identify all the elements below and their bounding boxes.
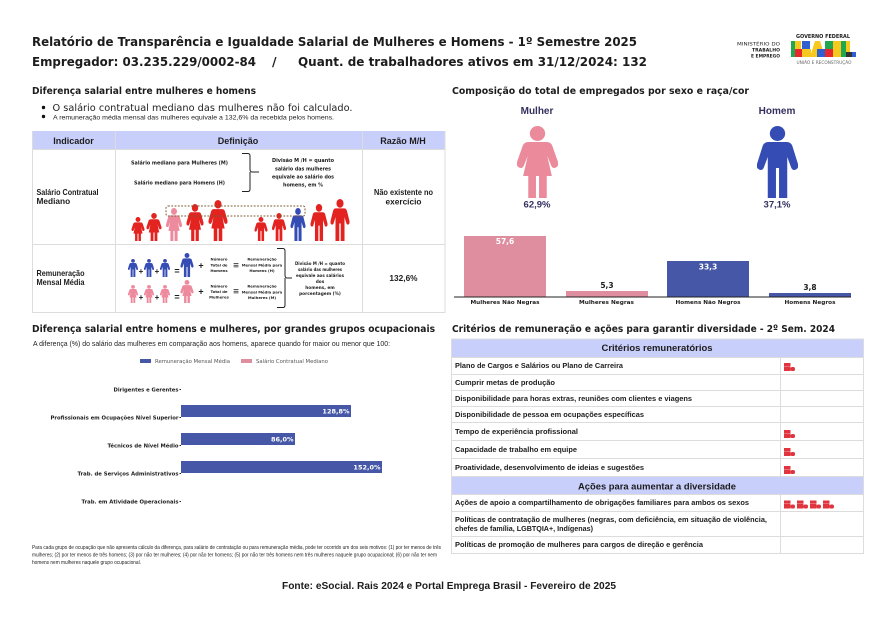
title: Relatório de Transparência e Igualdade Salarial de Mulheres e Homens - 1º Semestre 2025 [32, 34, 637, 49]
bullet list: O salário contratual mediano das mulheres não foi calculado. [52, 103, 352, 114]
definition: salário mediano: homens, em % [283, 182, 324, 188]
definition: remuneração formula [128, 248, 345, 308]
pictogram: median line of people [131, 199, 350, 241]
definition: remuneração formula: homens, em [305, 285, 335, 291]
bar chart: composição por sexo e raça: Mulheres Negras [579, 300, 635, 306]
section header: ações para aumentar a diversidade: Ações para aumentar a diversidade [578, 482, 736, 492]
footnote: mulheres; (2) por ter menos de três homens; (3) por não ter mulheres; (4) por não ter homens; (5) por não ter três homens nem três mulheres naquele grupo ocupacional; (6) por não ter nem [32, 552, 437, 558]
icon: homem 37,1%: 37,1% [764, 200, 791, 210]
logo: ministério e governo federal: MINISTÉRIO DO [737, 40, 781, 48]
legend [140, 358, 328, 365]
table: indicadores: Definição [218, 136, 259, 146]
definition: remuneração formula: ≡ [233, 286, 239, 298]
definition: remuneração formula: Mensal Média para [242, 262, 283, 268]
icon: mulher 62,9% [517, 106, 558, 210]
definition: remuneração formula: + [139, 267, 144, 276]
criteria list: Disponibilidade de pessoa em ocupações específicas [455, 410, 644, 419]
actions list: Políticas de promoção de mulheres para cargos de direção e gerência [455, 540, 704, 549]
logo: ministério e governo federal: GOVERNO FEDERAL [796, 34, 850, 40]
legend: Salário Contratual Mediano [256, 358, 328, 365]
definition: remuneração formula: Mensal Média para [242, 290, 283, 294]
definition: remuneração formula: Remuneração [247, 256, 277, 262]
bullet list [42, 103, 353, 122]
bar chart: grupos ocupacionais: 128,8% [322, 408, 350, 416]
criteria list: Plano de Cargos e Salários ou Plano de Carreira [455, 361, 624, 370]
bar chart: composição por sexo e raça: Homens Negros [784, 300, 836, 306]
definition: salário mediano: equivale ao salário dos [272, 174, 334, 180]
criteria list: Tempo de experiência profissional [455, 427, 578, 436]
definition: remuneração formula: + [155, 267, 160, 276]
footnote: homens nem mulheres naquele grupo ocupacional. [32, 560, 141, 566]
footnote [32, 545, 441, 566]
icon: mulher 62,9%: 62,9% [524, 200, 551, 210]
section header: critérios remuneratórios: Critérios remuneratórios [602, 343, 712, 353]
definition: remuneração formula: Mulheres [209, 294, 230, 300]
icons: building markers [784, 363, 834, 508]
table: indicadores: Razão M/H [380, 136, 426, 146]
definition: remuneração formula: Homens [210, 268, 228, 273]
row label: salário contratual mediano: Salário Contratual [36, 187, 98, 197]
source line: Fonte: eSocial. Rais 2024 e Portal Emprega Brasil - Fevereiro de 2025 [282, 581, 616, 592]
definition: remuneração formula: = [174, 292, 180, 302]
table: indicadores: exercício [386, 196, 421, 206]
definition: remuneração formula: + [139, 293, 144, 302]
definition: remuneração formula: + [198, 286, 204, 296]
logo: ministério e governo federal: TRABALHO [752, 48, 780, 54]
definition: salário mediano: Salário mediano para Mulheres (M) [131, 160, 228, 166]
heading: diferença salarial: Diferença salarial entre mulheres e homens [32, 86, 256, 97]
actions list: Ações de apoio a compartilhamento de obrigações familiares para ambos os sexos [455, 498, 749, 507]
subheading: explicação: A diferença (%) do salário das mulheres em comparação aos homens, aparece quando for maior ou menor que 100: [33, 339, 390, 348]
definition: remuneração formula: dos [316, 279, 325, 285]
definition: remuneração formula: Mulheres (M) [248, 295, 276, 300]
bar chart: grupos ocupacionais: Trab. de Serviços Administrativos [78, 472, 179, 478]
definition: remuneração formula: salário das mulheres [298, 266, 342, 273]
table: indicadores: Indicador [53, 136, 94, 146]
definition: remuneração formula: Divisão M /H = quanto [295, 261, 345, 267]
bar chart: composição por sexo e raça [454, 236, 851, 306]
table: critérios e ações [452, 339, 864, 554]
bar chart: grupos ocupacionais: 152,0% [353, 464, 381, 472]
actions list: chefes de família, LGBTQIA+, Indígenas) [455, 524, 593, 533]
bar chart: composição por sexo e raça: 33,3 [699, 262, 717, 272]
table: indicadores: Mensal Média [36, 277, 85, 287]
bar chart: grupos ocupacionais [50, 388, 382, 506]
criteria list: Disponibilidade para horas extras, reuniões com clientes e viagens [455, 394, 692, 403]
criteria list: Capacidade de trabalho em equipe [455, 445, 577, 454]
legend: Remuneração Mensal Média [155, 358, 230, 365]
table: indicadores: Mediano [36, 196, 70, 206]
bar chart: grupos ocupacionais: Trab. em Atividade Operacionais [82, 500, 179, 506]
bar chart: grupos ocupacionais: 86,0% [271, 436, 294, 444]
icon: mulher 62,9%: Mulher [521, 106, 553, 117]
title: Empregador: 03.235.229/0002-84 [32, 54, 256, 69]
heading: critérios de remuneração: Critérios de remuneração e ações para garantir diversidade - 2º Sem. 2024 [452, 323, 835, 335]
actions list [455, 498, 767, 549]
bar chart: composição por sexo e raça: 57,6 [496, 237, 514, 246]
bar chart: composição por sexo e raça: Mulheres Não Negras [470, 300, 540, 306]
definition: salário mediano: Salário mediano para Homens (H) [134, 180, 225, 186]
row label: remuneração mensal média: Remuneração [36, 268, 84, 278]
actions list: Políticas de contratação de mulheres (negras, com deficiência, em situação de violência, [455, 515, 767, 524]
logo: ministério e governo federal: E EMPREGO [751, 54, 780, 60]
definition: remuneração formula: + [198, 260, 204, 270]
definition: remuneração formula: Homens (H) [249, 268, 275, 273]
definition: remuneração formula: Total de [210, 262, 228, 268]
bar chart: composição por sexo e raça: Homens Não Negros [676, 300, 741, 306]
table: indicadores [32, 131, 445, 312]
definition: salário mediano: salário das mulheres [275, 166, 331, 172]
title: / [272, 54, 277, 69]
definition: remuneração formula: Número [211, 256, 228, 262]
bar chart: composição por sexo e raça: 3,8 [803, 283, 817, 292]
heading: grandes grupos ocupacionais: Diferença salarial entre homens e mulheres, por grandes grupos ocupacionais [32, 324, 435, 335]
bar chart: composição por sexo e raça: 5,3 [600, 281, 614, 290]
definition: remuneração formula: Número [211, 284, 228, 288]
bar chart: grupos ocupacionais: Técnicos de Nível Médio [108, 442, 179, 450]
definition: remuneração formula: ≡ [233, 260, 239, 272]
logo: ministério e governo federal: UNIÃO E RECONSTRUÇÃO [796, 60, 852, 65]
definition: remuneração formula: Total de [210, 289, 228, 294]
definition: remuneração formula: porcentagem (%) [299, 291, 341, 297]
icon: homem 37,1%: Homem [759, 106, 795, 117]
criteria list [455, 361, 692, 472]
ratio: 132,6%: 132,6% [389, 273, 418, 283]
criteria list: Proatividade, desenvolvimento de ideias e sugestões [455, 463, 644, 472]
title [32, 34, 647, 69]
footnote: Para cada grupo de ocupação que não apresenta cálculo da diferença, para salário de contratação ou para remuneração média, pode ter ocorrido um dos seis motivos: (1) por ter menos de três [32, 545, 441, 551]
definition: remuneração formula: = [174, 266, 180, 276]
bullet list: A remuneração média mensal das mulheres equivale a 132,6% da recebida pelos homens. [53, 114, 334, 122]
title: Quant. de trabalhadores ativos em 31/12/2024: 132 [298, 54, 647, 69]
criteria list: Cumprir metas de produção [455, 378, 555, 387]
bar chart: grupos ocupacionais: Dirigentes e Gerentes [114, 388, 179, 394]
icon: homem 37,1% [757, 106, 798, 210]
ratio: não existente: Não existente no [374, 187, 433, 197]
definition: salário mediano [131, 154, 334, 192]
definition: remuneração formula: + [155, 293, 160, 302]
definition: remuneração formula: Remuneração [247, 284, 277, 288]
logo: ministério e governo federal [737, 34, 856, 65]
definition: remuneração formula: equivale aos salários [296, 272, 344, 279]
bar chart: grupos ocupacionais: Profissionais em Ocupações Nível Superior [50, 414, 179, 422]
definition: salário mediano: Divisão M /H = quanto [272, 158, 334, 164]
heading: composição: Composição do total de empregados por sexo e raça/cor [452, 86, 749, 97]
